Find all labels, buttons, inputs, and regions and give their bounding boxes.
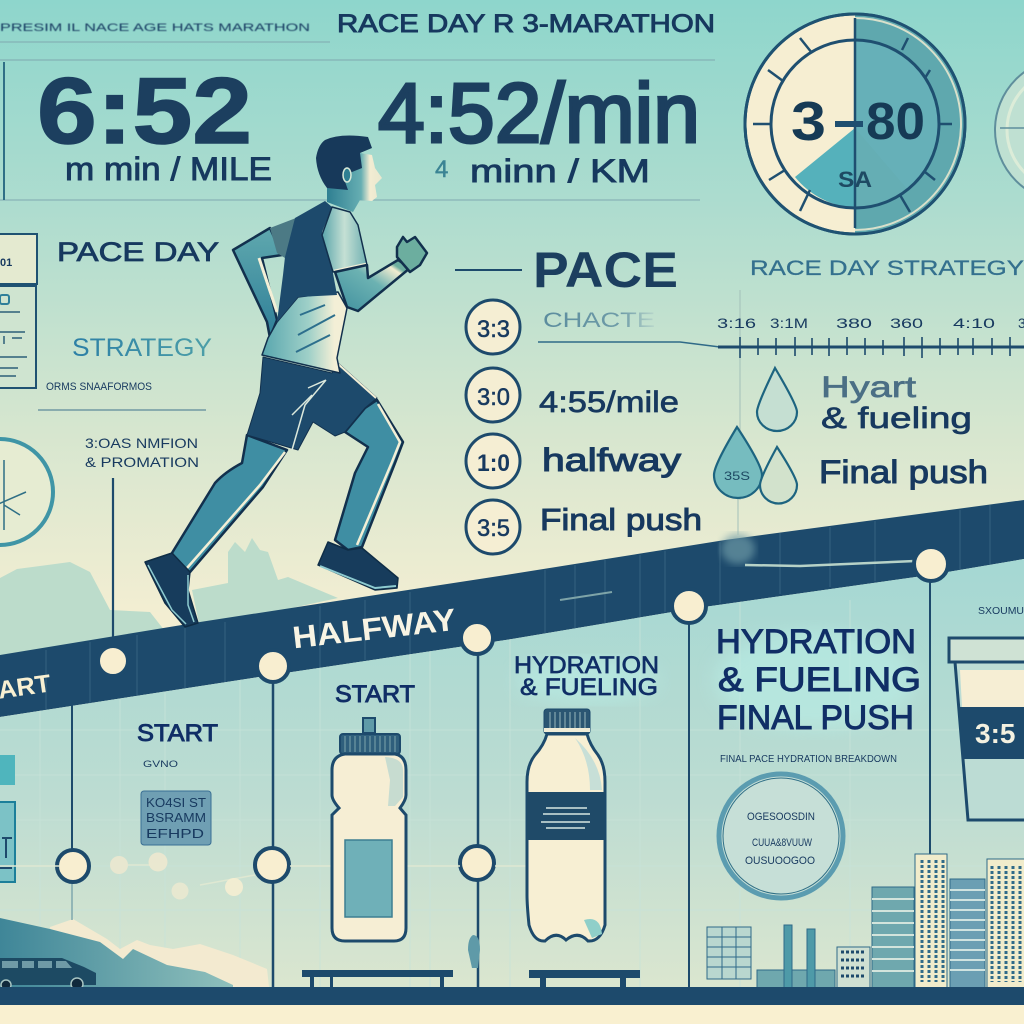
labels: hydrate and final push [819,371,988,490]
chart: clock pie [745,14,965,234]
stat: min per mile: m min / MILE [65,151,272,187]
connector lines [72,290,930,987]
stat: min per km: minn / KM [470,153,650,189]
ramp label: halfway: HALFWAY [291,602,458,655]
background mountains behind runner [0,538,338,665]
hair [316,136,372,190]
timeline markers on ramp [98,547,948,682]
sleeve [322,207,367,272]
back arm [233,228,282,338]
label: hydration small: HYDRATION [514,652,659,679]
pace checkpoint list: Final push [540,502,702,537]
small start note: GVNO [143,759,178,769]
chart: clock pie: 80 [866,93,925,151]
labels: hydrate and final push: Final push [819,454,988,490]
badge: OUSUOOGOO [745,855,815,867]
car [0,958,96,990]
pace checkpoint list: 1:0 [477,450,510,477]
small note right: SXOUMU [978,606,1024,617]
start chip: EFHPD [146,826,204,841]
left table panel: 01 [0,257,12,269]
dark vest [277,201,337,322]
back leg [172,435,287,572]
label: hydration small [514,652,659,701]
partial gauge at right edge [995,58,1024,202]
label: hydration and final push [716,623,921,737]
timeline axis: 3:16 [717,315,756,331]
left table panel [0,234,37,388]
stat: min per km: 4:52/min [378,66,700,160]
start chip: KO4SI ST [146,795,206,810]
fist [397,237,427,272]
stat: min per mile: 6:52 [37,58,252,163]
left watch dial [0,439,53,545]
front shoe [318,542,398,590]
pace checkpoint list: halfway [542,442,681,478]
start chip [141,791,211,845]
timeline axis: 360 [890,315,923,331]
small note: FINAL PACE HYDRATION BREAKDOWN [720,754,897,765]
pace checkpoint list [466,300,702,554]
start chip: BSRAMM [146,810,206,825]
runner [145,136,427,627]
ear [343,168,351,182]
chart label: CHACTE [543,309,655,332]
shorts [247,357,377,450]
bottom-left hills [0,918,269,987]
icon: sports bottle [332,718,406,941]
pace checkpoint list: 4:55/mile [539,386,679,419]
left teal screen [0,755,15,882]
front leg [335,400,403,550]
skyline [707,854,1024,988]
lower panel [0,559,1024,990]
pace heading: PACE [533,242,678,298]
label: hydration and final push: FINAL PUSH [717,699,914,737]
lower timeline markers [57,846,494,882]
timeline axis: 4:10 [953,315,995,331]
labels: hydrate and final push: & fueling [821,402,972,435]
track ramp [0,500,1024,717]
neck and face [327,153,382,212]
benches [302,935,640,987]
heading: strategy: STRATEGY [72,334,212,362]
note: nutrition: 3:OAS NMFION [85,435,198,451]
pale progress dots [0,852,560,900]
chart: clock pie: SA [838,167,872,192]
icon: water bottle [527,709,605,941]
header strip [0,10,715,200]
icon: drops: 35S [724,469,750,483]
timeline axis: 380 [836,315,872,331]
icon: cup [949,638,1024,820]
badge [719,774,843,898]
pace checkpoint list: 3:5 [477,515,510,542]
badge: OGESOOSDIN [747,811,815,823]
front arm [335,260,410,311]
icon: drops [714,368,797,504]
label: start mid: START [335,681,415,708]
chart label [538,309,720,347]
chart: clock pie: 3 [791,90,826,152]
note: nutrition: & PROMATION [85,454,199,470]
stat: min per km: 4 [435,156,448,183]
label: hydration small: & FUELING [520,674,658,701]
stat: min per mile [4,58,272,200]
gray shoulder [270,218,300,258]
labels: hydrate and final push: Hyart [821,371,917,404]
ground bar [0,987,1024,1005]
heading: race day strategy: RACE DAY STRATEGY [750,257,1024,280]
timeline axis [717,315,1024,358]
timeline axis: 3:1M [770,315,808,331]
back shoe [145,553,198,627]
label: hydration and final push: & FUELING [718,661,921,699]
note: nutrition [85,435,199,470]
small strategy note: ORMS SNAAFORMOS [46,381,152,393]
body of shirt [262,292,347,373]
icon: cup: 3:5 [975,718,1015,749]
pace checkpoint list: 3:3 [477,316,510,343]
pace checkpoint list: 3:0 [477,384,510,411]
badge: CUUA&8VUUW [752,837,812,849]
small header text: PRESIM IL NACE AGE HATS MARATHON [0,22,310,34]
title: RACE DAY R 3-MARATHON [337,10,715,38]
label: hydration and final push: HYDRATION [716,623,916,661]
heading: pace day: PACE DAY [57,237,219,267]
label: start left: START [137,720,218,747]
